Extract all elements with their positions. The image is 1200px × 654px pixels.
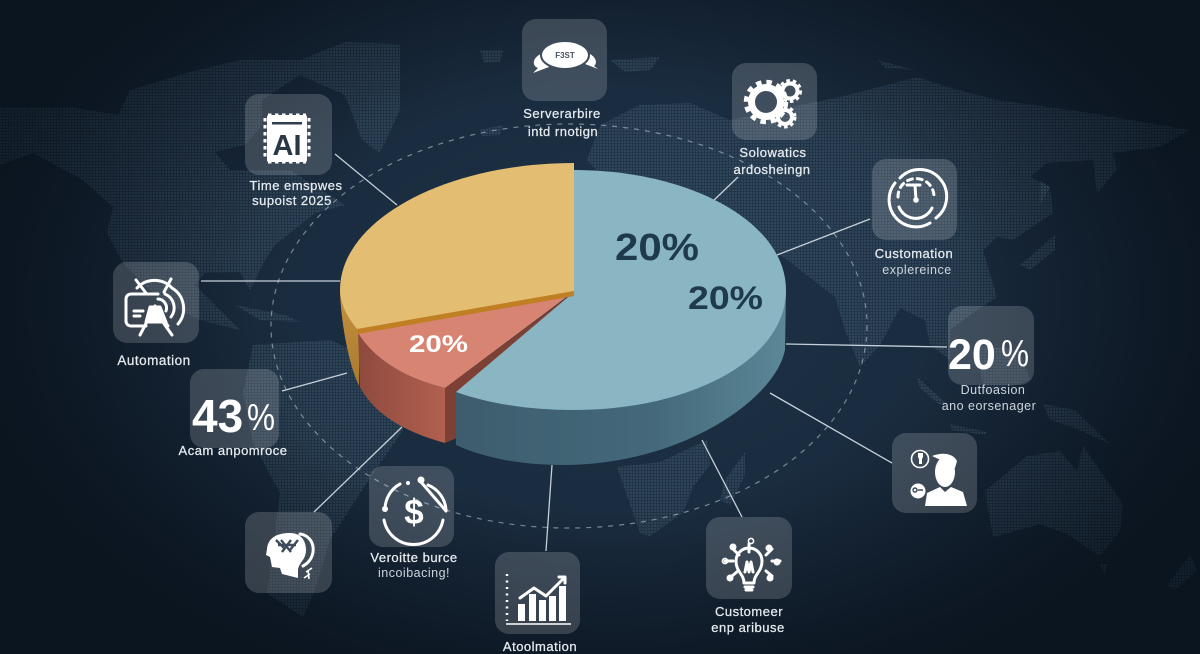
- caption: ardosheingn: [733, 162, 811, 177]
- card: brain: [245, 512, 332, 593]
- stat value: %: [247, 397, 275, 438]
- icon: speech bubbles: F3ST: [555, 51, 575, 60]
- caption: Atoolmation: [503, 639, 577, 654]
- card: dollar: [369, 466, 458, 580]
- card: gauge: [872, 159, 957, 277]
- caption: Customeer: [715, 604, 783, 619]
- blue side: [456, 290, 786, 465]
- icon: dollar cycle: $: [404, 493, 424, 532]
- card: growth chart: [495, 552, 580, 654]
- caption: intd rnotign: [528, 124, 598, 139]
- card: AI chip: [245, 94, 342, 208]
- caption: enp aribuse: [711, 620, 785, 635]
- icon: AI chip: AI: [272, 130, 302, 162]
- red slice side: [358, 333, 445, 443]
- icon: person with badges: [910, 450, 967, 506]
- dashed orbit ring: [271, 124, 867, 528]
- stat value: [192, 390, 275, 442]
- caption: explereince: [882, 263, 952, 277]
- card: 20% stat: [942, 306, 1036, 413]
- card: gears: [732, 63, 817, 177]
- card: person: [892, 433, 977, 513]
- label: 20% large: 20%: [615, 227, 699, 269]
- caption: ano eorsenager: [942, 399, 1036, 413]
- orange strip: [357, 290, 574, 334]
- caption: Solowatics: [739, 145, 807, 160]
- card: lightbulb: [706, 517, 792, 635]
- icon: antenna console: [126, 279, 184, 335]
- icon: gauge dial: [889, 170, 947, 227]
- red slice inner wall: [445, 293, 573, 443]
- stat value: %: [1001, 333, 1029, 375]
- caption: Customation: [875, 246, 953, 261]
- icon: head with brain: [266, 533, 313, 579]
- caption: Dutfoasion: [961, 383, 1025, 397]
- card: speech bubbles: [522, 19, 607, 139]
- card: Automation: [113, 262, 199, 368]
- caption: incoibacing!: [378, 566, 450, 580]
- label: 20% right: 20%: [688, 280, 763, 316]
- caption: Veroitte burce: [370, 550, 458, 565]
- connector lines: [201, 154, 947, 551]
- caption: Acam anpomroce: [179, 443, 287, 458]
- yellow top face: [340, 163, 574, 329]
- blue top face: [456, 170, 786, 410]
- stat value: 43: [192, 390, 243, 442]
- stat value: 20: [948, 331, 996, 379]
- caption: Time emspwes: [250, 178, 342, 193]
- stat value: [948, 331, 1029, 379]
- 3D pie chart: [340, 163, 786, 465]
- icon: lightbulb network: [722, 538, 780, 590]
- caption: Automation: [117, 353, 191, 368]
- red top face: [358, 293, 572, 388]
- label: 20% red slice: 20%: [409, 331, 468, 358]
- icon: gears: [746, 80, 800, 127]
- caption: supoist 2025: [252, 193, 332, 208]
- card: 43% stat: [179, 369, 287, 458]
- yellow side: [340, 292, 359, 386]
- icon: bar chart: [506, 574, 571, 624]
- caption: Serverarbire: [523, 106, 601, 121]
